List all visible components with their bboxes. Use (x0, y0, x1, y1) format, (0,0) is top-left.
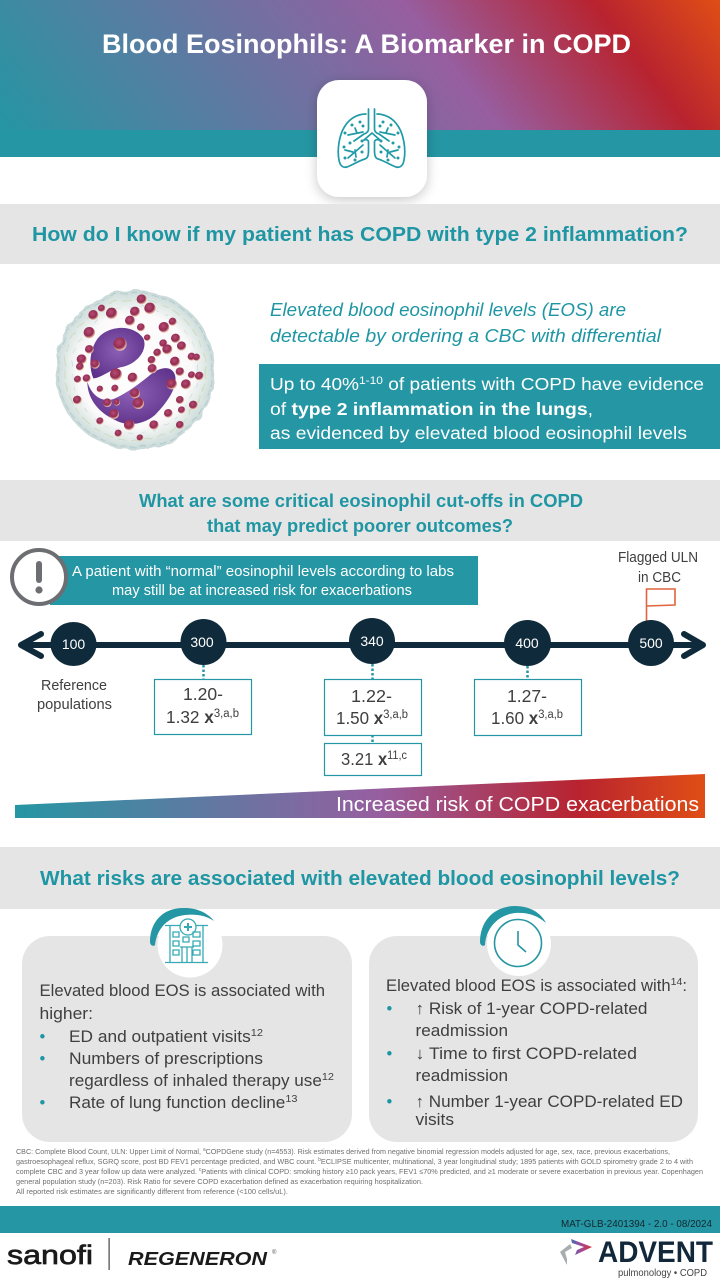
bullet list: 12 (322, 1071, 334, 1083)
bullet list: • (386, 1000, 392, 1018)
bullet list: Numbers of prescriptions (69, 1050, 263, 1068)
footnotes: complete CBC and 3 year follow up data were analyzed. (16, 1167, 205, 1176)
bullet list: visits (416, 1111, 454, 1129)
heading: What risks are associated with elevated blood eosinophil levels? (40, 867, 680, 890)
italic statement: Elevated blood eosinophil levels (EOS) are (270, 300, 626, 320)
node 100: 100 (62, 636, 85, 652)
connector dotted lines (204, 664, 528, 743)
footnotes: gastroesophageal reflux, SGRQ score, post BD FEV1 percentage predicted, and WBC count. (16, 1157, 330, 1166)
logo: sanofi: sanofi (7, 1240, 93, 1270)
panel text: 14 (671, 976, 683, 988)
bullet list (40, 1027, 334, 1112)
flagged ULN label (618, 550, 698, 586)
footnotes: c (199, 1167, 202, 1173)
bullet list: • (386, 1093, 392, 1111)
footnotes (16, 1147, 703, 1196)
bullet list: readmission (416, 1067, 508, 1085)
panel text (386, 976, 687, 1129)
logo: Advent pulmonology COPD: ADVENT (598, 1236, 713, 1269)
bullet list: regardless of inhaled therapy use (69, 1072, 313, 1090)
icon: Advent chevrons (560, 1239, 592, 1265)
heading: What are some critical eosinophil cut-offs in COPD (139, 490, 583, 511)
panel text: higher: (40, 1005, 93, 1023)
callout: normal eosinophil warning: may still be at increased risk for exacerbations (112, 583, 412, 599)
section band: risks question (0, 847, 720, 909)
callout: up to 40% of patients: of patients with COPD have evidence (383, 374, 704, 394)
icon: flag (646, 589, 675, 621)
title: Blood Eosinophils: A Biomarker in COPD (102, 29, 631, 59)
left arrowhead (21, 634, 41, 656)
risk box: 340 clinical COPD (324, 744, 422, 776)
risk box: 300: 1.20- (183, 684, 223, 704)
bullet list: • (386, 1045, 392, 1063)
reference populations label (37, 678, 112, 713)
bullet list: • (40, 1028, 46, 1046)
risk box: 340 clinical COPD: 11,c (387, 750, 407, 762)
footnotes: Patients with clinical COPD: smoking history ≥10 pack years, FEV1 ≤70% predicted, and ≥1 moderate or severe exacerbation in previous year. Copenhagen (201, 1167, 703, 1176)
node 500 (628, 620, 674, 666)
panel text: Elevated blood EOS is associated with (40, 982, 325, 1000)
flagged ULN label: in CBC (638, 570, 681, 586)
icon: lungs (338, 109, 405, 167)
risk box: 400: 1.27- (507, 686, 547, 706)
node 500: 500 (639, 635, 663, 651)
bullet list: ↓ Time to first COPD-related (416, 1045, 637, 1063)
increased risk wedge: Increased risk of COPD exacerbations (336, 794, 699, 816)
risk box: 400: 1.60 x (491, 708, 538, 728)
bullet list: 13 (285, 1093, 298, 1105)
italic statement (270, 300, 662, 346)
footnotes: COPDGene study (n=4553). Risk estimates derived from negative binomial regression models adjusted for age, sex, race, previous exacerbations, (206, 1147, 670, 1156)
node 400 (504, 620, 551, 666)
risk box: 340 clinical COPD: 3.21 x (341, 749, 388, 769)
node 340: 340 (360, 633, 384, 649)
logo: Advent pulmonology COPD (560, 1236, 713, 1279)
logo divider (108, 1238, 110, 1270)
italic statement: detectable by ordering a CBC with differential (270, 326, 662, 346)
callout: up to 40% of patients: Up to 40% (270, 374, 352, 394)
panel: healthcare utilization (22, 908, 352, 1142)
callout: normal eosinophil warning (12, 550, 478, 605)
node 300 (180, 619, 226, 665)
section band: type 2 inflammation question (0, 204, 720, 264)
panel text (40, 982, 334, 1112)
panel text: Elevated blood EOS is associated with (386, 977, 668, 995)
risk box: 340: 1.50 x (336, 708, 383, 728)
node 100 (50, 622, 96, 666)
heading: that may predict poorer outcomes? (207, 515, 513, 536)
risk box: 400: 3,a,b (538, 709, 563, 721)
bullet list: ↑ Number 1-year COPD-related ED (416, 1093, 683, 1111)
risk box: 340 (324, 680, 422, 736)
bullet list: • (40, 1094, 46, 1112)
callout: up to 40% of patients (259, 364, 720, 449)
timeline (21, 618, 703, 743)
bullet list: Rate of lung function decline (69, 1094, 277, 1112)
bullet list: ↑ Risk of 1-year COPD-related (416, 1000, 648, 1018)
bullet list: ED and outpatient visits (69, 1028, 242, 1046)
risk box: 300 (154, 680, 252, 734)
document code: MAT-GLB-2401394 - 2.0 - 08/2024 (561, 1219, 712, 1230)
logo: Regeneron: REGENERON (128, 1249, 268, 1269)
bullet list: 12 (251, 1027, 263, 1039)
risk box: 300: 3,a,b (214, 708, 239, 720)
flagged ULN label: Flagged ULN (618, 550, 698, 566)
footnotes: All reported risk estimates are significantly different from reference (<100 cells/uL). (16, 1187, 288, 1196)
risk box: 340: 3,a,b (383, 709, 408, 721)
icon: clock (480, 906, 551, 976)
panel text: : (682, 977, 687, 995)
node 300: 300 (190, 634, 214, 650)
panel: readmission (369, 906, 698, 1142)
bullet list (386, 1000, 683, 1129)
icon: hospital (150, 908, 222, 978)
footnotes: a (203, 1147, 206, 1153)
risk box: 340: 1.22- (351, 686, 392, 706)
heading: How do I know if my patient has COPD with type 2 inflammation? (32, 223, 688, 246)
bullet list: • (40, 1050, 46, 1068)
node 400: 400 (515, 635, 539, 651)
callout: up to 40% of patients: 1-10 (359, 375, 383, 387)
reference populations label: Reference (41, 678, 107, 694)
callout: up to 40% of patients: as evidenced by elevated blood eosinophil levels (270, 423, 687, 443)
node 340 (349, 618, 395, 664)
increased risk wedge (15, 774, 705, 818)
reference populations label: populations (37, 697, 112, 713)
footnotes: general population study (n=203). Risk Ratio for severe COPD exacerbation defined as exacerbation requiring hospitalization. (16, 1177, 423, 1186)
header teal band (0, 130, 720, 157)
section band: critical cut-offs question (0, 480, 720, 541)
footnotes: b (318, 1157, 321, 1163)
callout: normal eosinophil warning: A patient with “normal” eosinophil levels according to labs (72, 564, 454, 580)
callout: up to 40% of patients: of type 2 inflammation in the lungs , (270, 399, 593, 419)
risk box: 400 (474, 680, 582, 736)
heading (139, 490, 583, 536)
icon card: lungs (317, 80, 427, 197)
header gradient banner (0, 0, 720, 130)
icon: exclamation mark (12, 550, 66, 604)
footer teal band (0, 1206, 720, 1233)
right arrowhead (684, 634, 703, 656)
logo: Regeneron: ® (272, 1249, 277, 1256)
risk box: 300: 1.32 x (166, 707, 214, 727)
footnotes: CBC: Complete Blood Count, ULN: Upper Limit of Normal, (16, 1147, 212, 1156)
logo: Advent pulmonology COPD: pulmonology • COPD (618, 1267, 707, 1279)
bullet list: readmission (416, 1022, 508, 1040)
illustration: eosinophil cell (55, 290, 215, 450)
footnotes: ECLIPSE multicenter, multinational, 3 year longitudinal study; 1895 patients with GOLD spirometry grade 2 to 4 with (321, 1157, 693, 1166)
